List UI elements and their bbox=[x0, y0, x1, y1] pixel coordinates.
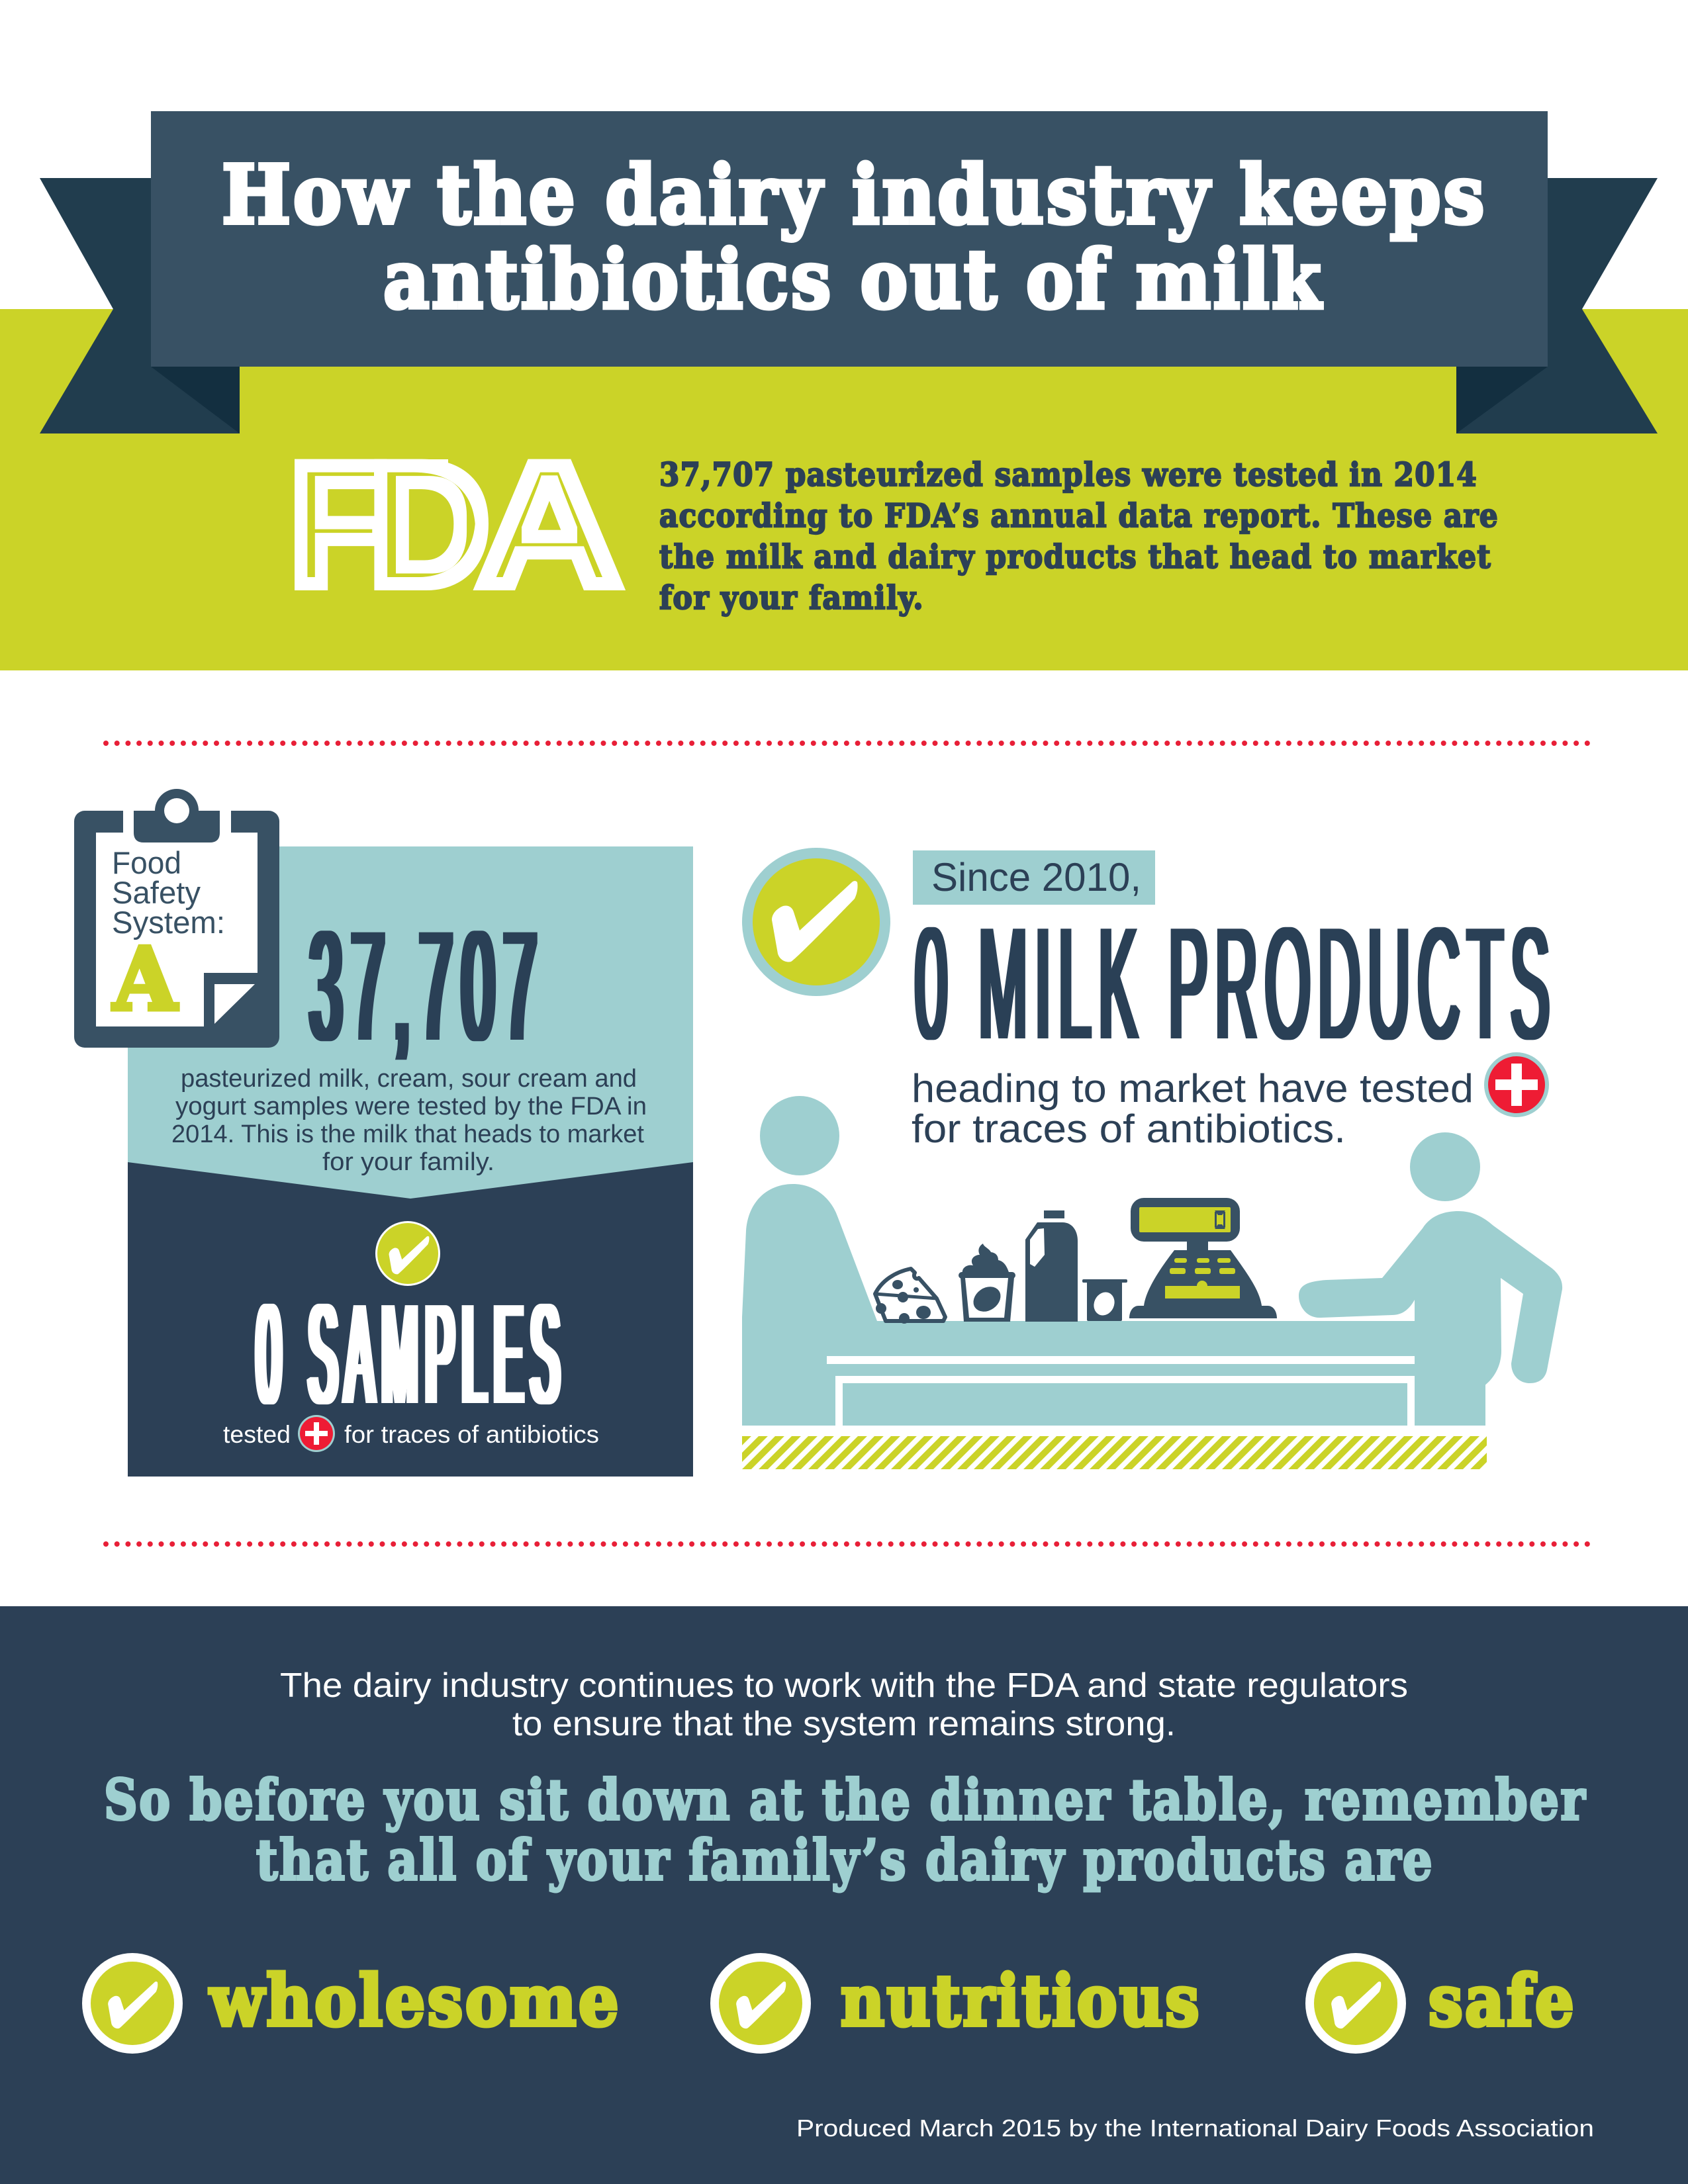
FDA logo: A bbox=[477, 427, 622, 623]
clipboard text: Safety bbox=[112, 875, 201, 910]
description text: 2014. This is the milk that heads to market bbox=[171, 1120, 644, 1148]
icon: small check bbox=[375, 1221, 440, 1286]
item: safe bbox=[1305, 1953, 1576, 2054]
item: safe: safe bbox=[1429, 1959, 1576, 2042]
caption: tested for traces: for traces of antibiotics bbox=[344, 1421, 599, 1448]
description text: pasteurized milk, cream, sour cream and bbox=[181, 1065, 637, 1093]
ribbon: left tail bbox=[40, 178, 240, 433]
panel: dark footer bbox=[0, 1606, 1688, 2184]
text: regulators statement: to ensure that the system remains strong. bbox=[512, 1705, 1176, 1743]
text: regulators statement: The dairy industry continues to work with the FDA and state regulators bbox=[280, 1666, 1408, 1705]
clipboard text bbox=[112, 845, 225, 940]
clipboard text: System: bbox=[112, 905, 225, 940]
icon: yogurt bbox=[1082, 1279, 1127, 1321]
text: regulators statement bbox=[280, 1666, 1408, 1743]
item: wholesome bbox=[82, 1953, 621, 2054]
FDA logo: A bbox=[477, 427, 622, 623]
title bbox=[222, 147, 1487, 327]
hatched floor bbox=[742, 1436, 1487, 1469]
icon: cash register bbox=[1129, 1198, 1277, 1318]
item: wholesome: wholesome bbox=[209, 1959, 621, 2042]
figure: customer right bbox=[1299, 1132, 1562, 1426]
text: heading to market: for traces of antibiotics. bbox=[912, 1107, 1346, 1151]
clipboard text: Food bbox=[112, 845, 181, 880]
FDA logo bbox=[289, 427, 622, 623]
item: nutritious bbox=[710, 1953, 1201, 2054]
counter bbox=[742, 1321, 1485, 1426]
title banner bbox=[151, 111, 1548, 367]
FDA logo: F bbox=[289, 427, 388, 623]
title: How the dairy industry keeps bbox=[222, 147, 1487, 242]
figure: cashier left bbox=[742, 1096, 887, 1426]
credit line: Produced March 2015 by the International Dairy Foods Association bbox=[796, 2115, 1594, 2142]
icon: clipboard bbox=[74, 789, 279, 1048]
intro text: 37,707 pasteurized samples were tested in 2014 bbox=[659, 455, 1477, 494]
caption: tested for traces bbox=[223, 1421, 599, 1448]
infographic: 0 SAMPLES bbox=[257, 1274, 567, 1433]
heading: dinner table: that all of your family’s dairy products are bbox=[256, 1827, 1434, 1893]
icon: milk jug bbox=[1025, 1210, 1078, 1322]
icon: small plus bbox=[298, 1415, 335, 1452]
icon: cheese bbox=[875, 1269, 945, 1324]
panel: green intro band bbox=[0, 309, 1688, 670]
FDA logo: F bbox=[289, 427, 388, 623]
illustration: checkout scene bbox=[742, 1096, 1562, 1469]
intro text: the milk and dairy products that head to market bbox=[659, 537, 1491, 576]
FDA logo: D bbox=[368, 427, 491, 623]
caption: tested for traces: tested bbox=[223, 1421, 291, 1448]
panel: 37,707 samples bbox=[128, 846, 693, 1477]
heading: dinner table bbox=[104, 1767, 1587, 1893]
item: nutritious: nutritious bbox=[841, 1959, 1201, 2042]
icon: big plus bbox=[1484, 1052, 1549, 1117]
intro text: for your family. bbox=[659, 578, 924, 617]
intro text bbox=[659, 455, 1499, 617]
dotted divider top bbox=[106, 741, 1597, 746]
label: since 2010: Since 2010, bbox=[931, 855, 1141, 899]
text: heading to market bbox=[912, 1066, 1474, 1151]
icon: big check bbox=[742, 848, 890, 996]
title: antibiotics out of milk bbox=[383, 232, 1323, 327]
ribbon: right tail bbox=[1456, 178, 1658, 433]
intro text: according to FDA’s annual data report. These are bbox=[659, 496, 1499, 535]
grade A: A bbox=[112, 929, 178, 1030]
description text bbox=[171, 1065, 647, 1176]
description text: yogurt samples were tested by the FDA in bbox=[175, 1093, 647, 1120]
text: heading to market: heading to market have tested bbox=[912, 1066, 1474, 1111]
panel: 37,707 samples: 37,707 bbox=[310, 899, 546, 1073]
icon: cup with whip bbox=[959, 1244, 1015, 1322]
FDA logo: D bbox=[368, 427, 491, 623]
dotted divider bottom bbox=[106, 1541, 1597, 1547]
description text: for your family. bbox=[322, 1148, 494, 1176]
